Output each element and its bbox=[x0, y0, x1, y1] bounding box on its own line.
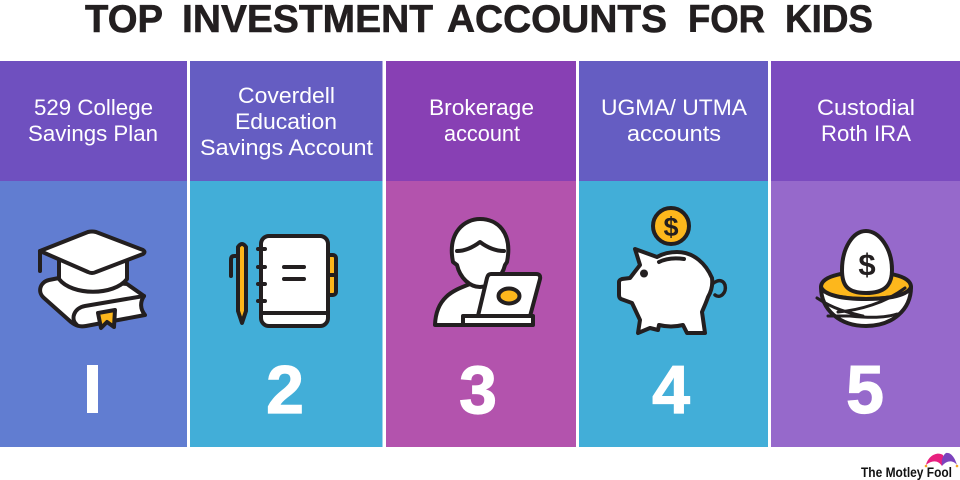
label: 529 College Savings Plan bbox=[28, 95, 158, 146]
panel: 529 college savings plan bbox=[0, 61, 187, 447]
logo: The Motley Fool bbox=[861, 453, 958, 480]
label: Coverdell Education Savings Account: Savings Account bbox=[200, 135, 374, 160]
label: UGMA/ UTMA accounts bbox=[601, 95, 747, 146]
panel: brokerage account bbox=[386, 61, 576, 447]
number 1: 1 bbox=[71, 352, 108, 428]
number 2: 2 bbox=[266, 352, 304, 428]
icon: piggy bank and coin: $ bbox=[663, 212, 679, 242]
panel: custodial Roth IRA bbox=[771, 61, 960, 447]
label: 529 College Savings Plan: Savings Plan bbox=[28, 121, 158, 146]
icon: piggy bank and coin bbox=[619, 208, 725, 333]
panel: Coverdell education savings account bbox=[190, 61, 382, 447]
icon: graduation cap on book bbox=[40, 232, 145, 328]
label: Custodial Roth IRA: Roth IRA bbox=[821, 121, 911, 146]
icon: nest egg bbox=[817, 231, 911, 326]
label: Brokerage account bbox=[429, 95, 534, 146]
icon: person with laptop bbox=[435, 219, 540, 325]
label: Custodial Roth IRA bbox=[817, 95, 915, 146]
label: Brokerage account: account bbox=[444, 121, 521, 146]
icon: jester hat bbox=[925, 453, 958, 467]
label: Brokerage account: Brokerage bbox=[429, 95, 534, 120]
label: UGMA/ UTMA accounts: UGMA/ UTMA bbox=[601, 95, 747, 120]
icon: nest egg: $ bbox=[858, 247, 876, 282]
label: Custodial Roth IRA: Custodial bbox=[817, 95, 915, 120]
icon: notebook and pen bbox=[231, 236, 336, 326]
number 5: 5 bbox=[846, 352, 884, 428]
label: UGMA/ UTMA accounts: accounts bbox=[627, 121, 721, 146]
title bbox=[85, 0, 873, 41]
label: 529 College Savings Plan: 529 College bbox=[34, 95, 153, 120]
label: Coverdell Education Savings Account: Education bbox=[235, 109, 337, 134]
panel: UGMA UTMA accounts bbox=[579, 61, 768, 447]
label: Coverdell Education Savings Account: Coverdell bbox=[238, 83, 335, 108]
label: Coverdell Education Savings Account bbox=[200, 83, 374, 160]
number 3: 3 bbox=[459, 352, 497, 428]
number 4: 4 bbox=[652, 352, 690, 428]
